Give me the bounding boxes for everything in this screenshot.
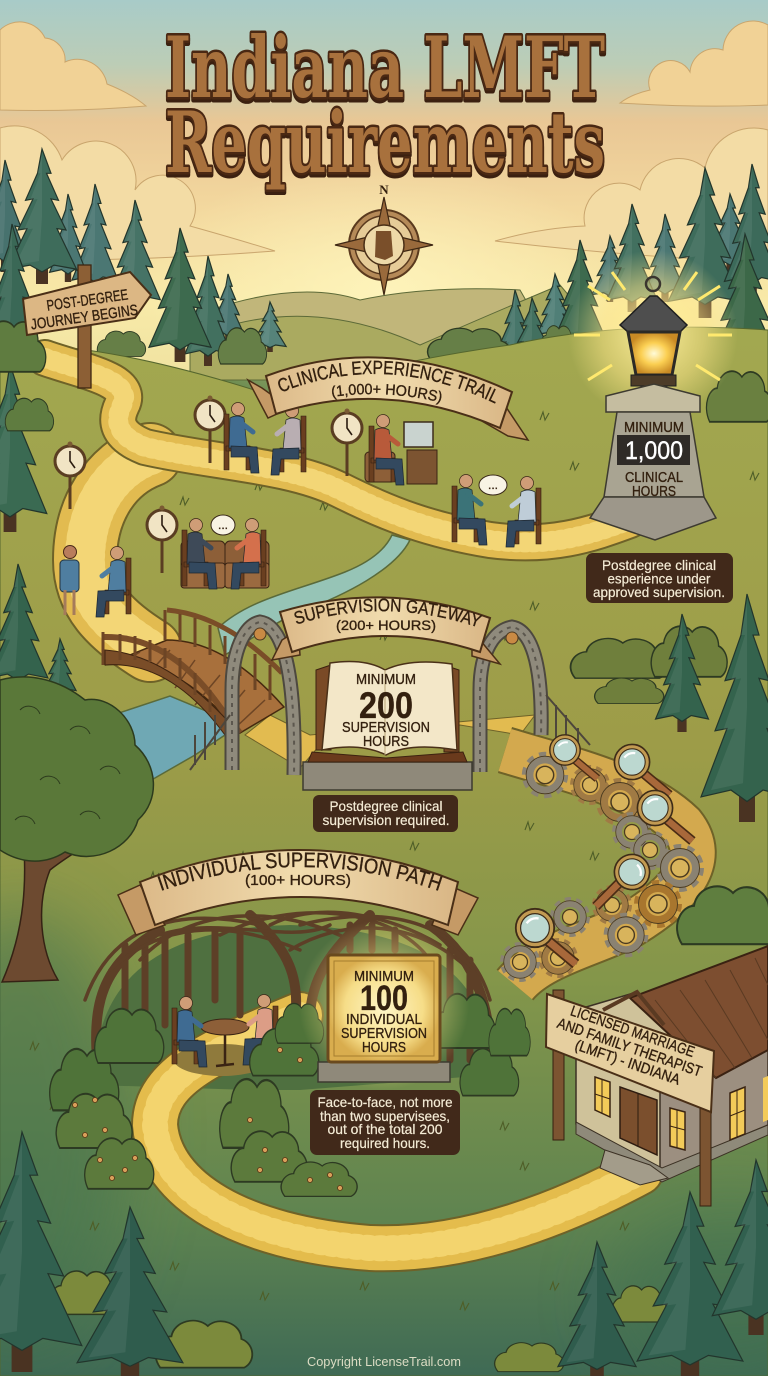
people: telehealth desk: [365, 414, 437, 485]
left side trees: [0, 364, 76, 697]
open book: minimum 200 supervision hours: [303, 662, 472, 790]
plaque: minimum 100 individual supervision hours: HOURS: [362, 1039, 406, 1056]
caption: face-to-face: than two supervisees,: [320, 1108, 450, 1124]
caption: clinical experience: esperience under: [608, 570, 711, 586]
plaque: minimum 100 individual supervision hours: MINIMUM: [354, 968, 414, 985]
compass rose with Indiana: N: [379, 182, 389, 197]
arbor forest backdrop: [95, 925, 490, 1090]
shrub flowers: [72, 1048, 342, 1190]
people: armchair conversation: ...: [218, 518, 228, 532]
monument: minimum 1,000 clinical hours: [568, 250, 738, 540]
people: armchair conversation: [181, 515, 269, 589]
licensed therapist destination sign: AND FAMILY THERAPIST: [555, 1015, 704, 1081]
banner: clinical experience trail: CLINICAL EXPERIENCE TRAIL: [278, 360, 496, 404]
left side bushes: [0, 321, 54, 431]
right side trees: [656, 594, 768, 822]
caption: face-to-face: Face-to-face, not more: [318, 1094, 453, 1110]
people: meeting on trail: [224, 402, 306, 475]
sky glow: [144, 160, 624, 420]
monument: minimum 1,000 clinical hours: 1,000: [625, 437, 683, 465]
open book: minimum 200 supervision hours: HOURS: [363, 733, 409, 750]
licensed therapist destination sign: [546, 990, 714, 1206]
clocks: [55, 396, 362, 573]
caption: supervision required: Postdegree clinical: [330, 798, 442, 814]
large oak tree: [0, 677, 153, 982]
monument: minimum 1,000 clinical hours: MINIMUM: [624, 419, 684, 436]
golden trail: through gateway: [245, 715, 535, 768]
plaque: minimum 100 individual supervision hours: INDIVIDUAL: [346, 1011, 422, 1028]
golden trail: toward bridge: [85, 455, 150, 650]
grass tufts: [30, 412, 759, 1310]
post-degree signpost: [23, 265, 151, 388]
caption: supervision required: [313, 795, 458, 832]
clouds: [0, 21, 768, 262]
caption: clinical experience: Postdegree clinical: [602, 557, 716, 573]
plaque: minimum 100 individual supervision hours: [299, 920, 469, 1090]
plaque: minimum 100 individual supervision hours: SUPERVISION: [341, 1025, 427, 1042]
gears and magnifying glasses: [504, 735, 700, 978]
right side bushes: [571, 371, 768, 703]
open book: minimum 200 supervision hours: 200: [359, 685, 413, 726]
arbor trees: [85, 912, 491, 1090]
banner: supervision gateway: (200+ HOURS): [336, 617, 436, 633]
far forest, left: [0, 149, 286, 366]
people: standing and seated pair: [60, 546, 131, 617]
caption: clinical experience: approved supervision.: [593, 584, 725, 600]
banner: supervision gateway: SUPERVISION GATEWAY: [294, 598, 482, 626]
banner: clinical experience trail: (1,000+ HOURS): [332, 384, 442, 405]
caption: clinical experience: [586, 553, 733, 603]
golden trail: clinical experience: [45, 358, 630, 542]
sky background: [0, 0, 768, 380]
banner: individual supervision path: INDIVIDUAL SUPERVISION PATH: [158, 852, 442, 891]
banner: supervision gateway: [270, 596, 502, 666]
foreground trees: [0, 1132, 768, 1376]
banner: individual supervision path: (100+ HOURS): [245, 872, 351, 889]
shrubs: [50, 994, 530, 1196]
lower meadow shading: [0, 910, 768, 1376]
banner: clinical experience trail: [246, 356, 530, 442]
caption: face-to-face: required hours.: [340, 1135, 430, 1151]
meadow ground: [0, 327, 768, 1376]
golden trail: individual supervision: [155, 1015, 640, 1248]
people: conversation on trail: ...: [488, 478, 498, 492]
caption: face-to-face: [310, 1090, 460, 1155]
round background trees: [97, 326, 575, 364]
river: [98, 535, 410, 782]
gate arches: [190, 622, 590, 775]
distant hills: [190, 285, 640, 380]
monument: minimum 1,000 clinical hours: CLINICAL: [625, 469, 683, 486]
bridge: [103, 610, 284, 735]
banner: individual supervision path: [117, 849, 479, 936]
plaque: minimum 100 individual supervision hours: 100: [360, 979, 408, 1018]
licensed therapist destination sign: LICENSED MARRIAGE: [568, 1003, 697, 1061]
gear trail: [505, 750, 693, 985]
licensed therapist destination sign: (LMFT) - INDIANA: [573, 1037, 682, 1089]
people at cafe table: [172, 994, 278, 1076]
open book: minimum 200 supervision hours: SUPERVISION: [342, 719, 430, 736]
open book: minimum 200 supervision hours: MINIMUM: [356, 671, 416, 688]
post-degree signpost: JOURNEY BEGINS: [30, 302, 139, 333]
title: [165, 18, 605, 192]
caption: face-to-face: out of the total 200: [328, 1121, 443, 1137]
post-degree signpost: POST-DEGREE: [46, 286, 129, 315]
people: conversation on trail: [452, 474, 541, 547]
house: [576, 946, 768, 1185]
foreground bushes: [50, 1271, 667, 1372]
monument: minimum 1,000 clinical hours: HOURS: [632, 483, 676, 500]
bushes upper right: [677, 886, 768, 944]
caption: supervision required: supervision required.: [322, 812, 450, 828]
compass rose with Indiana: [335, 182, 433, 295]
far forest, right: [494, 164, 768, 378]
copyright: Copyright LicenseTrail.com: [307, 1354, 461, 1369]
